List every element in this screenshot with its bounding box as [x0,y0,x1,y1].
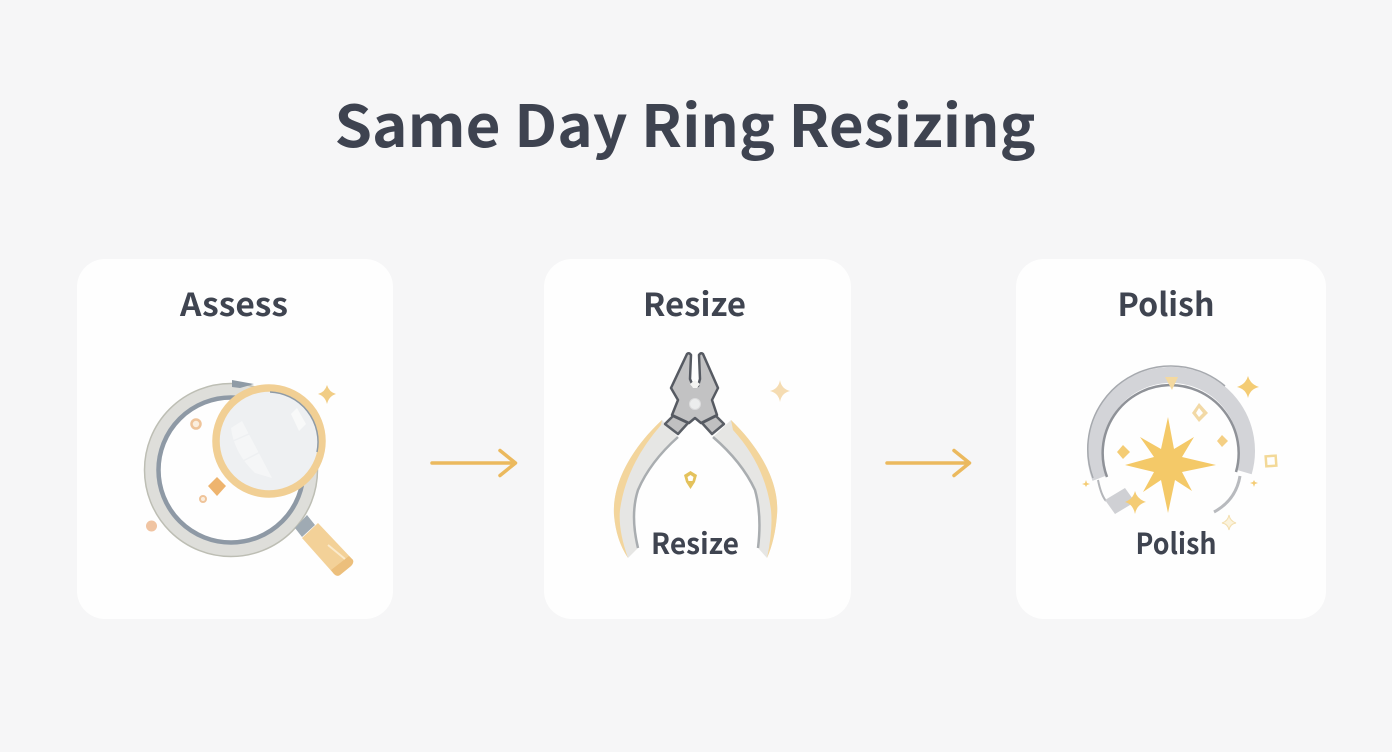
icon: large star [1125,417,1216,513]
icon: sparkles and dots [146,385,336,532]
icon: small gem [684,471,697,489]
icon: magnifying glass handle [295,515,353,576]
heading: polish: Polish [1118,280,1214,326]
panel: assess [77,259,393,619]
label: polish: Polish [1136,521,1216,563]
icon: pliers [614,353,777,558]
heading: assess: Assess [179,280,288,326]
arrow: assess to resize [432,450,516,476]
icon: polished ring [1088,366,1247,514]
icon: sparkles [1082,376,1276,530]
icon: magnifying glass lens [216,388,322,494]
icon: ring under magnifying glass [144,380,318,556]
panel: polish [1016,259,1326,619]
arrow: resize to polish [887,450,970,476]
icon: sparkle [770,380,790,402]
panel: resize [544,259,851,619]
heading: resize: Resize [643,280,746,326]
label: resize: Resize [651,521,739,563]
title: Same Day Ring Resizing [334,80,1036,164]
